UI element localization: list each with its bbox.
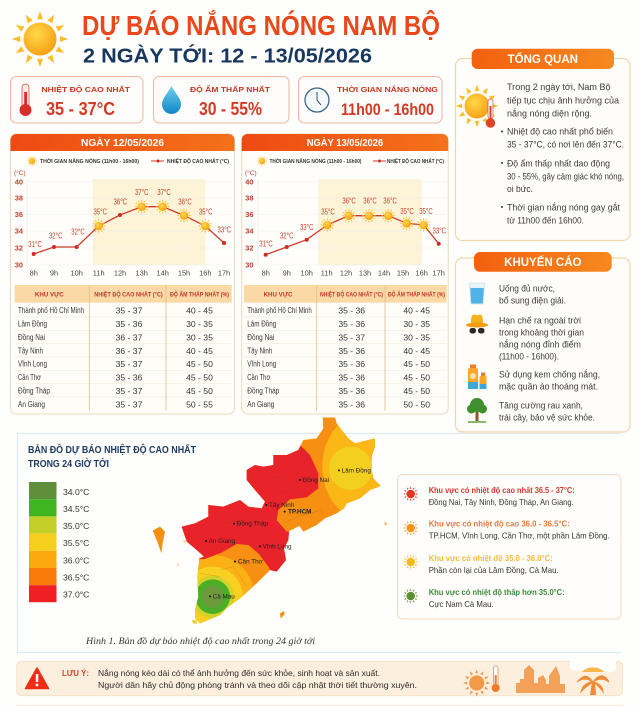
line chart: day 1 [14,169,232,278]
icon: sun and thermometer [456,85,498,128]
map labels: Lâm Đồng [342,465,371,474]
map labels: Cần Thơ [238,557,263,566]
line chart: day 1: 36°C [114,196,127,206]
line chart: day 1: 32 [15,244,23,252]
table: day 2: Tây Ninh [247,346,272,355]
overview text: từ 11h00 đến 16h00. [507,214,584,226]
line chart: day 2: 11h [321,268,333,278]
temperature scale legend: 34.5°C [63,504,89,514]
line chart: day 1: 38 [15,194,23,202]
recommendations text: mặc quần áo thoáng mát. [499,380,598,392]
icon: sun [12,11,68,67]
table: day 2: Đồng Nai [247,333,274,342]
line chart: day 2: 35°C [321,206,335,216]
overview text: tiếp tục chịu ảnh hưởng của [507,94,620,106]
map of southern Vietnam [152,417,387,624]
overview text: Nhiệt độ cao nhất phổ biến [507,126,613,136]
line chart: day 1: 40 [15,178,23,186]
table: day 1: 36 - 37 [116,346,143,356]
overview text: 35 - 37°C, có nơi lên đến 37°C. [507,138,624,150]
table: day 1: ĐỘ ẨM THẤP NHẤT (%) [170,290,229,298]
line chart: day 1: 36°C [178,196,192,206]
table: day 2: Lâm Đồng [247,320,276,328]
icon: warning triangle [26,668,48,688]
table: day 2: 30 - 35 [403,332,430,342]
recommendations text: bổ sung điện giải. [499,294,566,306]
stat card: highest temperature [10,76,143,123]
map heading: TRONG 24 GIỜ TỚI [28,458,109,470]
stat card: hot hours: 11h00 - 16h00 [341,100,434,119]
table: day 1: Đồng Tháp [18,386,50,395]
recommendations text: (11h00 - 16h00). [499,350,559,362]
recommendations text: Uống đủ nước, [499,282,555,294]
temperature scale legend: 34.0°C [63,487,89,497]
line chart: day 1: 37°C [157,187,171,197]
line chart: day 2: 36 [245,210,254,219]
zone: hottest: Khu vực có nhiệt độ cao nhất 36.5 - 37°C: [429,486,575,495]
recommendations text: Sử dụng kem chống nắng, [499,368,600,380]
map caption: Hình 1. Bản đồ dự báo nhiệt độ cao nhất trong 24 giờ tới [85,636,315,647]
table: day 1: 40 - 45 [186,346,213,356]
temperature scale legend: 37.0°C [63,590,89,600]
chart legend: NHIỆT ĐỘ CAO NHẤT (°C) [387,157,444,165]
stat card: hot hours [298,76,442,123]
panel: temperature map [18,410,621,653]
temperature scale legend: 35.5°C [63,538,89,548]
zone: lower [403,588,565,609]
table: day 1: 30 - 35 [186,332,213,342]
table: day 2: 45 - 50 [403,386,430,396]
panel: day 1 forecast [10,134,234,414]
line chart: day 2: 35°C [400,206,414,216]
line chart: day 1: 12h [114,268,126,278]
table: day 1: 40 - 45 [186,306,213,316]
zone: high: TP.HCM, Vĩnh Long, Cần Thơ, một phần Lâm Đồng. [429,532,610,540]
table: day 1: 35 - 37 [116,306,143,316]
overview text: Thời gian nắng nóng gay gắt [507,202,620,212]
table: day 2: An Giang [247,400,274,409]
recommendations text: trái cây, bảo vệ sức khỏe. [499,412,595,422]
icon: clock [305,88,329,112]
table: day 1: Tây Ninh [18,346,43,355]
table: day 1: KHU VỰC [35,292,64,298]
line chart: day 2: 9h [283,268,291,278]
overview text: nắng nóng diện rộng. [507,108,592,118]
map labels: Tây Ninh [269,502,295,509]
line chart: day 1: 9h [50,268,58,278]
table: day 1: 35 - 36 [116,372,143,382]
zone: moderate: Khu vực có nhiệt độ 35.0 - 36.0°C: [429,554,553,563]
chart legend [257,156,444,166]
line chart: day 1: 35°C [94,206,107,216]
line chart: day 1: 8h [30,268,38,278]
map labels: An Giang [209,538,236,545]
table: day 1 [15,285,232,411]
zone: high: Khu vực có nhiệt độ cao 36.0 - 36.5°C: [429,520,570,528]
temperature scale legend: 36.0°C [63,556,89,566]
line chart: day 2: 15h [397,268,409,278]
line chart: day 2: 16h [416,268,428,278]
title: DỰ BÁO NẮNG NÓNG NAM BỘ [82,9,440,41]
line chart: day 2: 14h [378,268,390,278]
chart legend: NHIỆT ĐỘ CAO NHẤT (°C) [167,157,229,165]
map heading [28,444,196,470]
table: day 1: An Giang [18,400,45,409]
chart legend [27,156,229,166]
table: day 2: 45 - 50 [403,372,430,382]
recommendations text: Tăng cường rau xanh, [499,400,583,410]
table: day 1: Đồng Nai [18,333,45,342]
table: day 1: Vĩnh Long [18,360,47,369]
table: day 2: 35 - 36 [338,306,365,316]
table: day 1: 35 - 36 [116,319,143,329]
heading: overview: TỔNG QUAN [508,53,578,66]
chart legend: THỜI GIAN NẮNG NÓNG (11h00 - 16h00) [40,157,139,165]
table: day 1: 50 - 55 [186,400,213,410]
map labels: Đồng Nai [303,475,329,484]
icon: city skyline [516,665,565,693]
recommendations text: Hạn chế ra ngoài trời [499,314,581,326]
table: day 2: 35 - 37 [338,332,365,342]
map labels: TP.HCM [288,509,311,516]
table: day 1: 35 - 37 [116,400,143,410]
line chart: day 2: (°C) [245,169,257,177]
table: day 2: 40 - 45 [403,346,430,356]
line chart: day 2: 10h [301,268,313,278]
line chart: day 2: 38 [245,194,254,202]
heading: recommendations: KHUYẾN CÁO [504,256,582,269]
note text: Người dân hãy chủ động phòng tránh và theo dõi cập nhật thời tiết thường xuyên. [98,680,417,690]
zone: moderate [403,554,559,575]
callout: note: LƯU Ý: [62,667,89,678]
icon: water glass [470,283,484,304]
table: day 2: ĐỘ ẨM THẤP NHẤT (%) [388,290,445,298]
line chart: day 1: 34 [15,226,24,236]
zone: moderate: Phần còn lại của Lâm Đồng, Cà Mau. [429,566,559,575]
line chart: day 1: 15h [178,268,190,278]
table: day 1: NHIỆT ĐỘ CAO NHẤT (°C) [94,290,163,298]
table: day 2 [244,285,447,411]
callout: note [17,660,623,697]
overview text: Độ ẩm thấp nhất dao động [507,158,610,168]
table: day 2: 50 - 50 [403,400,430,410]
table: day 2: Đồng Tháp [247,386,280,395]
icon: hat and sunglasses [466,315,488,334]
icon: water drop [162,86,181,114]
table: day 2: NHIỆT ĐỘ CAO NHẤT (°C) [320,290,383,298]
map labels: Đồng Tháp [237,519,268,528]
table: day 2: 35 - 36 [338,386,365,396]
zone: lower: Cực Nam Cà Mau. [429,600,494,609]
overview text [501,81,624,226]
temperature scale legend: 36.5°C [63,572,89,582]
table: day 2: 30 - 35 [403,319,430,329]
map labels: Vĩnh Long [263,543,292,550]
icon: sunscreen bottles [468,364,486,389]
table: day 2: Vĩnh Long [247,360,276,369]
note text [98,668,417,690]
table: day 2: KHU VỰC [264,292,293,298]
table: day 1: Cần Thơ [18,373,42,382]
header [12,9,440,68]
table: day 2: 40 - 45 [403,306,430,316]
table: day 2: 35 - 36 [338,400,365,410]
table: day 1: 35 - 37 [116,386,143,396]
subtitle: 2 NGÀY TỚI: 12 - 13/05/2026 [83,44,372,68]
temperature scale legend [29,482,89,602]
line chart: day 1: (°C) [14,169,26,177]
line chart: day 1: 17h [218,268,230,278]
line chart: day 2: 8h [262,268,270,278]
line chart: day 1: 32°C [49,230,62,240]
line chart: day 1: 11h [93,268,105,278]
panel: recommendations [456,252,630,432]
line chart: day 1: 35°C [199,206,212,216]
line chart: day 2: 36°C [363,196,377,206]
table: day 2: Thành phố Hồ Chí Minh [247,306,312,315]
line chart: day 2: 13h [359,268,371,278]
heading: day 1: NGÀY 12/05/2026 [81,136,164,149]
panel: temperature zones [398,474,621,619]
line chart: day 1: 16h [199,268,211,278]
line chart: day 1: 32°C [71,226,85,236]
line chart: day 1: 31°C [28,239,42,249]
table: day 1: 45 - 50 [186,359,213,369]
line chart: day 2: 30 [245,260,254,270]
overview text: Trong 2 ngày tới, Nam Bộ [507,81,610,92]
line chart: day 2: 33°C [300,222,313,232]
table: day 2: 35 - 36 [338,372,365,382]
heading: day 2: NGÀY 13/05/2026 [307,136,383,149]
table: day 1: 35 - 37 [116,359,143,369]
zone: high [403,520,610,540]
recommendations text [499,282,600,422]
map labels: Cà Mau [213,593,235,600]
temperature scale legend: 35.0°C [63,521,89,531]
line chart: day 2: 36°C [342,196,356,206]
panel: day 2 forecast [242,134,448,414]
line chart: day 2: 35°C [419,206,433,216]
stat card: highest temperature: 35 - 37°C [46,99,115,119]
table: day 1: 45 - 50 [186,386,213,396]
table: day 2: 45 - 50 [403,359,430,369]
table: day 1: Thành phố Hồ Chí Minh [18,306,84,315]
icon: sun and thermometer decoration [463,666,500,697]
table: day 1: 30 - 35 [186,319,213,329]
recommendations text: nắng nóng đỉnh điểm [499,338,581,350]
table: day 2: 35 - 36 [338,359,365,369]
line chart: day 1: 13h [136,268,148,278]
next section strip [17,705,623,706]
map labels [205,465,371,600]
note text: Nắng nóng kéo dài có thể ảnh hưởng đến sức khỏe, sinh hoạt và sản xuất. [98,668,380,678]
table: day 2: 35 - 36 [338,319,365,329]
stat card: lowest humidity: ĐỘ ẨM THẤP NHẤT [190,84,270,94]
line chart: day 2: 31°C [259,238,273,248]
line chart: day 2: 36°C [383,196,397,206]
icon: tree [467,398,487,422]
line chart: day 2: 17h [433,268,445,278]
icon: palm tree and sun [570,660,616,695]
heading: overview [472,49,614,69]
line chart: day 1: 36 [15,210,23,219]
overview text: oi bức. [507,183,533,194]
table: day 2: Cần Thơ [247,373,271,382]
line chart: day 2: 32°C [280,230,293,240]
line chart: day 1: 10h [71,268,83,278]
line chart: day 2: 34 [245,226,254,236]
table: day 1: 36 - 37 [116,332,143,342]
stat card: hot hours: THỜI GIAN NẮNG NÓNG [337,85,438,94]
recommendations text: trong khoảng thời gian [499,326,584,338]
islands [153,522,387,624]
stat card: lowest humidity [154,76,289,123]
line chart: day 1: 30 [15,260,23,270]
panel: overview [456,49,630,241]
line chart: day 2: 32 [245,244,254,252]
line chart: day 1: 37°C [135,187,148,197]
zone: hottest: Đồng Nai, Tây Ninh, Đồng Tháp, An Giang. [429,498,574,507]
icon: thermometer [20,84,32,116]
zone: hottest [403,486,575,507]
table: day 1: 45 - 50 [186,372,213,382]
chart legend: THỜI GIAN NẮNG NÓNG (11h00 - 16h00) [270,157,362,165]
line chart: day 2: 33°C [433,226,446,236]
table: day 2: 35 - 36 [338,346,365,356]
map heading: BẢN ĐỒ DỰ BÁO NHIỆT ĐỘ CAO NHẤT [28,444,196,456]
table: day 1: Lâm Đồng [18,320,47,328]
line chart: day 2 [245,169,446,278]
line chart: day 1: 14h [157,268,169,278]
line chart: day 2: 40 [245,178,254,186]
heading: day 1 [10,134,234,151]
heading: day 2 [242,134,448,151]
zone: lower: Khu vực có nhiệt độ thấp hơn 35.0°C: [429,588,565,597]
heading: recommendations [474,252,612,272]
line chart: day 1: 33°C [218,224,231,234]
stat card: lowest humidity: 30 - 55% [199,99,262,119]
stat card: highest temperature: NHIỆT ĐỘ CAO NHẤT [42,84,130,94]
line chart: day 2: 12h [340,268,352,278]
